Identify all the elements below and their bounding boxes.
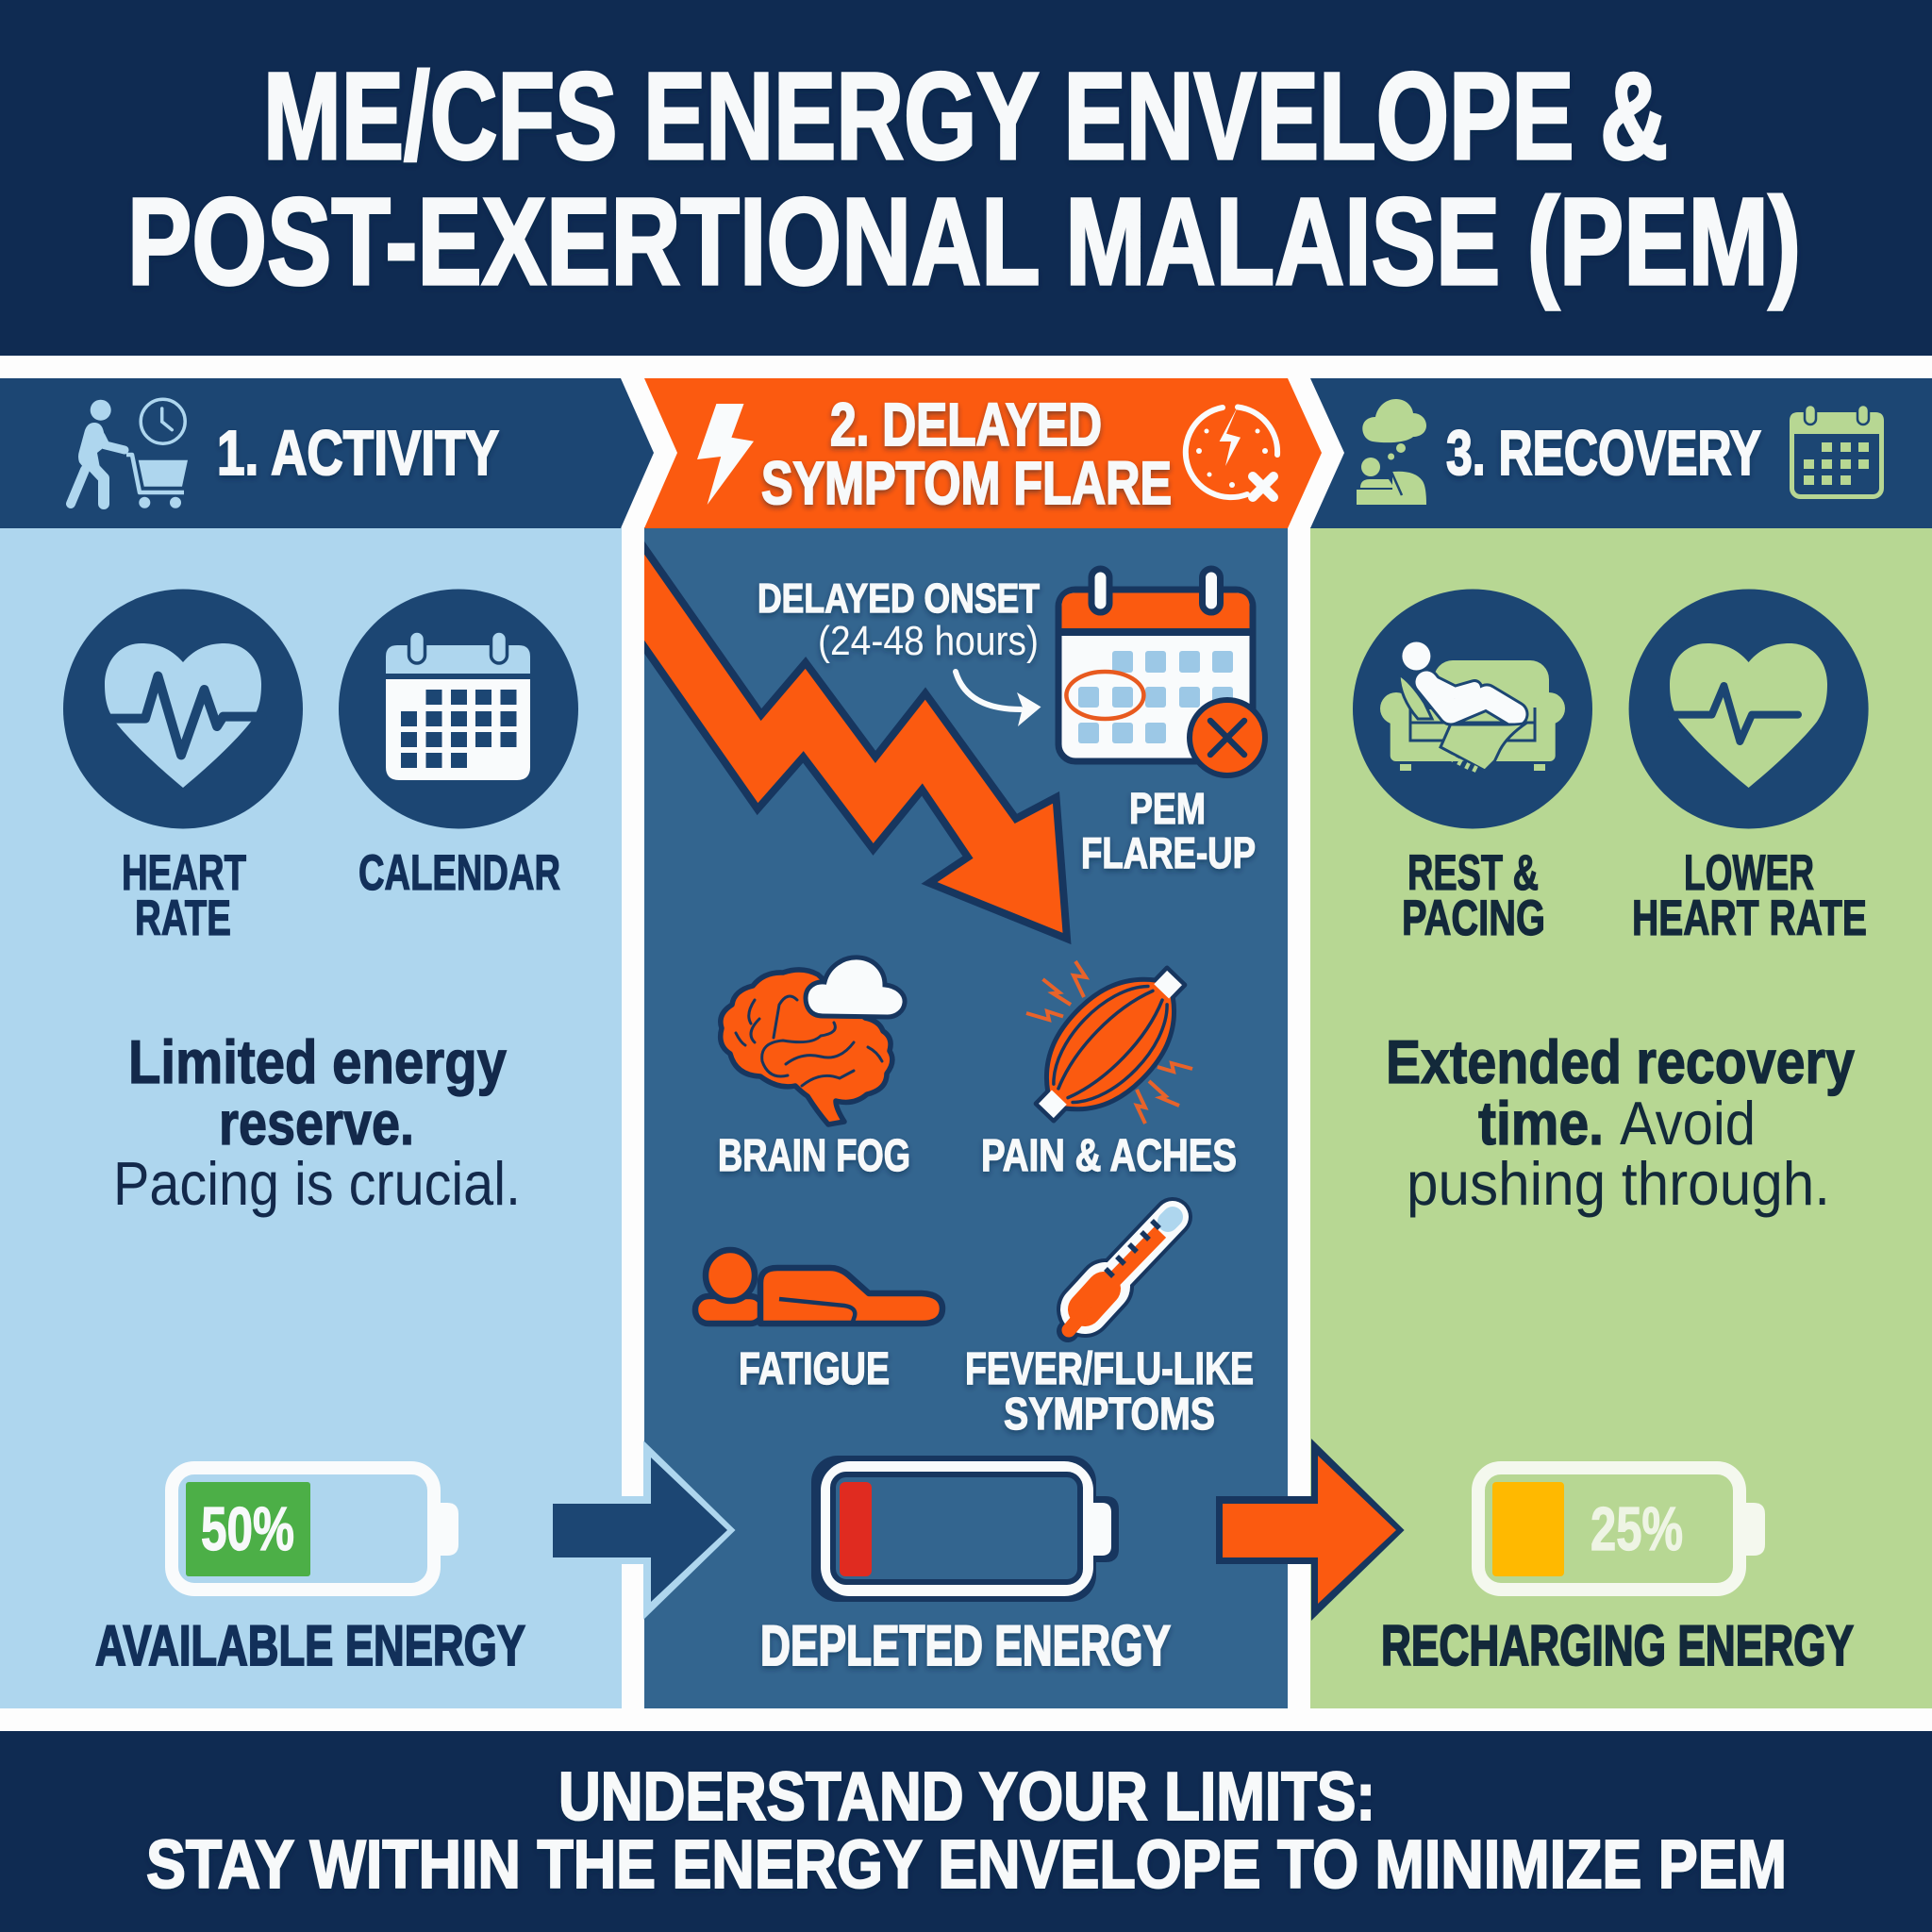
footer banner: [0, 1731, 1932, 1932]
icon: flare calendar: [1058, 569, 1265, 775]
icon: lower heart rate: [1629, 589, 1869, 828]
label: pem flare-up: PEM: [1129, 784, 1206, 833]
label: heart rate: [122, 845, 246, 946]
arrow: curved pointer: [956, 672, 1041, 726]
heading: 1. activity: 1. ACTIVITY: [217, 418, 499, 489]
icon: thermometer: [1068, 1217, 1173, 1331]
arrow: activity to flare: [553, 1441, 736, 1620]
title banner: [0, 0, 1932, 356]
panel: recovery: [1310, 378, 1932, 1708]
text: limited energy reserve: [113, 1027, 521, 1218]
icon: rest on sofa: [1353, 589, 1592, 828]
label: heart rate: RATE: [135, 891, 231, 946]
label: fever and flu-like symptoms: FEVER/FLU-LIKE: [965, 1344, 1254, 1394]
text: extended recovery time: Extended recovery: [1386, 1027, 1855, 1096]
icon: fatigue figure: [695, 1250, 942, 1324]
label: rest and pacing: PACING: [1402, 891, 1545, 946]
label: pain and aches: PAIN & ACHES: [981, 1131, 1237, 1181]
panel: activity: [0, 378, 654, 1708]
icon: resting person with thought cloud: [1357, 399, 1426, 505]
footer line 1: UNDERSTAND YOUR LIMITS:: [558, 1759, 1375, 1835]
icon: battery 50 percent: 50%: [201, 1494, 294, 1563]
label: depleted energy: DEPLETED ENERGY: [760, 1614, 1171, 1677]
heading: 2. delayed symptom flare: [761, 391, 1172, 517]
panel: delayed symptom flare: [634, 378, 1322, 1708]
header: delayed symptom flare: [644, 378, 1322, 528]
text: extended recovery time: Avoid: [1620, 1089, 1756, 1158]
icon: brain fog: [721, 958, 905, 1124]
text: delayed onset: [758, 575, 1040, 664]
text: delayed onset: DELAYED ONSET: [758, 575, 1040, 622]
label: fatigue: FATIGUE: [739, 1344, 890, 1394]
heading: 3. recovery: 3. RECOVERY: [1446, 418, 1761, 489]
text: extended recovery time: time.: [1478, 1089, 1604, 1158]
icon: heart rate: [63, 589, 303, 828]
label: brain fog: BRAIN FOG: [718, 1131, 910, 1181]
arrow: flare to recovery: [1216, 1439, 1405, 1621]
icon: battery 50 percent: [172, 1468, 458, 1590]
text: limited energy reserve: Limited energy: [128, 1027, 507, 1096]
label: fever and flu-like symptoms: SYMPTOMS: [1004, 1390, 1215, 1440]
icon: person with cart and clock: [71, 399, 188, 508]
icon: lightning bolt: [697, 404, 754, 505]
label: lower heart rate: [1632, 845, 1867, 946]
icon: calendar: [339, 589, 578, 828]
label: heart rate: HEART: [122, 845, 246, 901]
header: activity: [0, 378, 654, 528]
icon: battery 25 percent: [1478, 1468, 1765, 1590]
icon: recovery calendar: [1790, 405, 1884, 496]
icon: depleted battery: [811, 1456, 1119, 1602]
heading: 2. delayed symptom flare: SYMPTOM FLARE: [761, 449, 1172, 517]
heading: 2. delayed symptom flare: 2. DELAYED: [830, 391, 1102, 458]
text: delayed onset: (24-48 hours): [818, 618, 1039, 664]
text: limited energy reserve: reserve.: [219, 1089, 414, 1158]
label: calendar: CALENDAR: [358, 845, 560, 901]
label: rest and pacing: [1402, 845, 1545, 946]
text: limited energy reserve: Pacing is crucial.: [113, 1149, 521, 1218]
arrow: zigzag decline: [634, 533, 1067, 939]
icon: battery 25 percent: 25%: [1591, 1494, 1683, 1563]
icon: muscle pain: [1011, 943, 1209, 1145]
label: rest and pacing: REST &: [1407, 845, 1539, 901]
label: available energy: AVAILABLE ENERGY: [95, 1614, 525, 1677]
header: recovery: [1310, 378, 1932, 528]
label: pem flare-up: FLARE-UP: [1081, 828, 1256, 877]
text: extended recovery time: [1386, 1027, 1855, 1218]
label: lower heart rate: LOWER: [1684, 845, 1814, 901]
icon: clock with bolt and cross: [1186, 407, 1277, 497]
label: pem flare-up: [1081, 784, 1256, 877]
label: fever and flu-like symptoms: [965, 1344, 1254, 1440]
text: extended recovery time: pushing through.: [1407, 1149, 1830, 1218]
